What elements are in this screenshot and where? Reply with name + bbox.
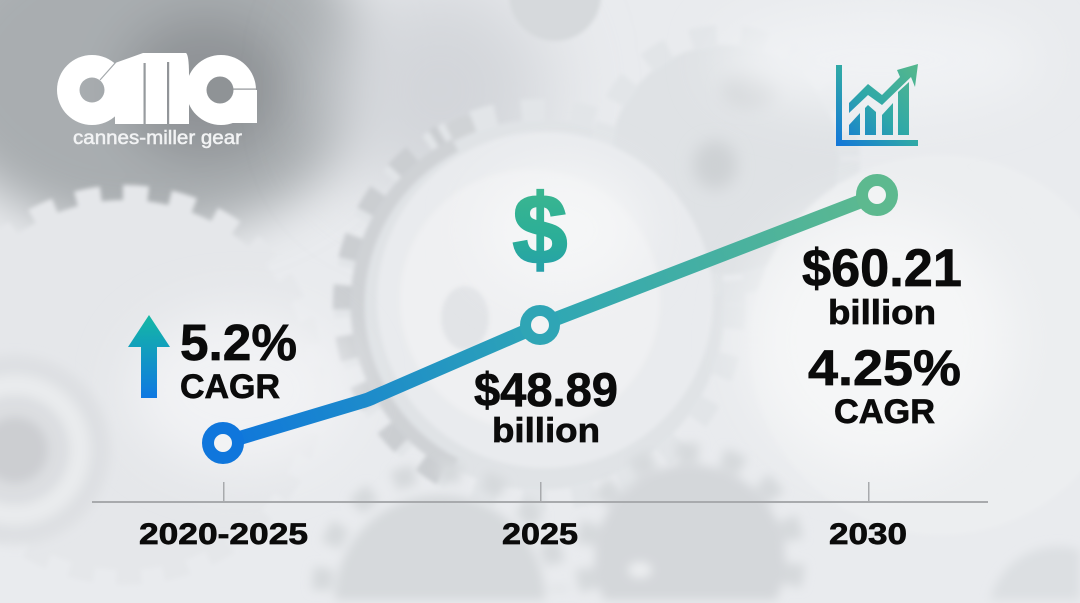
- growth line chart: [208, 180, 892, 458]
- trend line: [223, 195, 877, 443]
- stat: 5.2% CAGR: CAGR: [180, 368, 280, 406]
- stat: 4.25% CAGR: [808, 340, 961, 431]
- axis label: 2030: 2030: [829, 518, 907, 551]
- logo wordmark: cannes-miller gear: [73, 128, 243, 149]
- icon: dollar sign: $: [513, 174, 567, 284]
- grey gears behind: [345, 0, 849, 500]
- icon: growth chart: [836, 64, 918, 146]
- logo: [57, 53, 257, 148]
- upper-left dark gear shadow: [0, 0, 375, 235]
- axis label: 2025: 2025: [502, 518, 578, 551]
- stat: $60.21 billion: $60.21: [802, 239, 962, 298]
- stat: $60.21 billion: [802, 239, 962, 332]
- stat: 5.2% CAGR: 5.2%: [180, 314, 297, 371]
- stat: $48.89 billion: [474, 363, 618, 450]
- marker 2025: [526, 310, 554, 340]
- stat: 4.25% CAGR: 4.25%: [808, 340, 961, 396]
- light gear left: [0, 195, 315, 575]
- stat: $48.89 billion: billion: [492, 412, 600, 450]
- spindle lower-left: [0, 355, 110, 545]
- stat: $60.21 billion: billion: [828, 294, 936, 332]
- marker 2030: [862, 180, 892, 210]
- icon: up arrow: [128, 315, 170, 398]
- light gear centre: [377, 132, 713, 468]
- bottom gears: [322, 453, 1080, 600]
- stat: 5.2% CAGR: [180, 314, 297, 406]
- stat: 4.25% CAGR: CAGR: [834, 393, 935, 431]
- axis label: 2020-2025: 2020-2025: [139, 518, 308, 551]
- right-hand light disc: [750, 155, 1080, 535]
- logo mark: [57, 53, 257, 125]
- stat: $48.89 billion: $48.89: [474, 363, 618, 416]
- timeline axis: [92, 482, 988, 503]
- marker 2020: [208, 428, 238, 458]
